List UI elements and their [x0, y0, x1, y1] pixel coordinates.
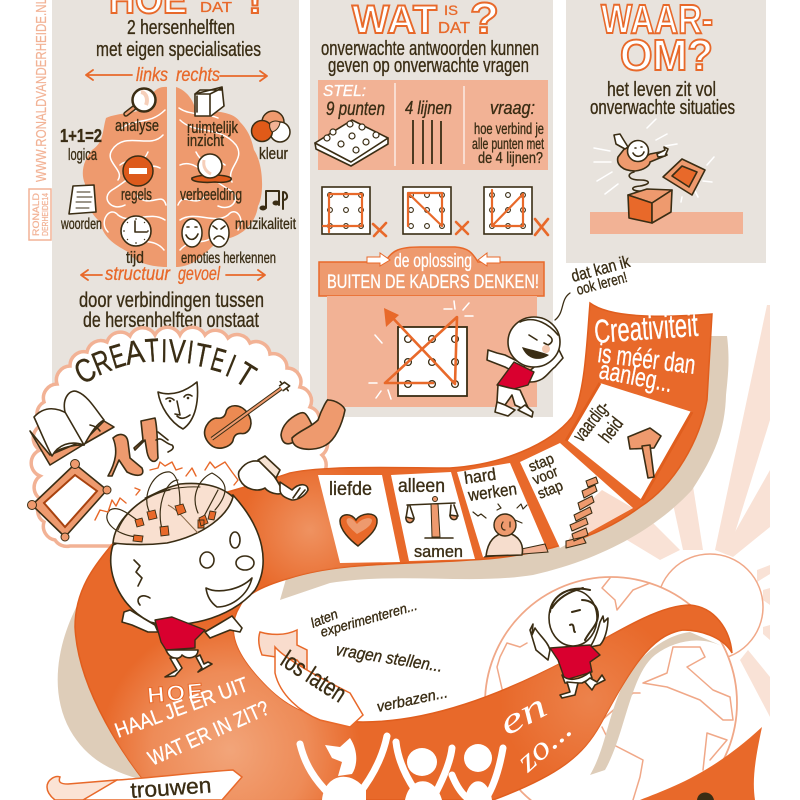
inner ribbon notes: vragen stellen... [334, 640, 444, 676]
title: creativiteit: T [192, 336, 213, 375]
labels: links rechts: rechts [176, 65, 220, 86]
electrodes and wires [107, 472, 225, 542]
conclusion text [79, 289, 264, 332]
los laten banner [259, 630, 363, 727]
card: stap voor stap: stap [526, 450, 557, 476]
labels: links rechts: links [136, 65, 168, 86]
intro text: het leven zit vol [607, 79, 716, 101]
icon: violin [199, 371, 297, 454]
brain labels: ruimtelijk [187, 118, 238, 137]
brain diagram [83, 87, 262, 267]
panel: waarom [566, 0, 766, 263]
intro text: onverwachte antwoorden kunnen [321, 38, 539, 60]
card: alleen samen: samen [414, 542, 463, 561]
lightbulb [238, 456, 308, 500]
text: hoe haal je er uit: HAAL JE ER UIT [112, 673, 251, 743]
puzzle panel: 4 lijnen [405, 98, 452, 118]
website credit: RONALD [31, 192, 41, 236]
website credit: DERHEIDE14 [41, 193, 50, 236]
title: creativiteit: I [185, 333, 196, 371]
puzzle panel: de 4 lijnen? [478, 150, 543, 167]
heading: creativiteit is meer dan aanleg: Creativiteit [593, 306, 699, 350]
ribbon end at bottom right [640, 727, 762, 800]
puzzle panel: STEL: [323, 83, 366, 100]
speech squiggle [555, 293, 570, 320]
card: vaardigheid: heid [595, 414, 628, 447]
icon: clock [121, 216, 151, 246]
intro text [590, 79, 735, 119]
title: creativiteit: T [144, 331, 160, 369]
group of people silhouettes [300, 736, 503, 800]
website credit [29, 0, 51, 240]
title: creativiteit: I [161, 332, 168, 369]
brain labels: inzicht [187, 131, 224, 150]
brain labels: logica [68, 145, 97, 164]
heading: wat is dat: IS [444, 2, 458, 18]
inner ribbon notes: experimenteren... [318, 597, 419, 640]
trouwen banner [47, 770, 242, 800]
labels: links rechts [86, 65, 267, 86]
heading: creativiteit is meer dan aanleg: is méér dan [596, 338, 697, 380]
speech text: ook leren! [575, 269, 629, 299]
text: en zo: zo... [508, 710, 579, 779]
wrong attempt 1 [322, 187, 386, 236]
jack in the box [594, 119, 714, 223]
inner ribbon notes: verbazen... [375, 684, 449, 716]
heading: creativiteit is meer dan aanleg: aanleg... [597, 354, 675, 398]
intro text [321, 38, 539, 77]
title: creativiteit: A [122, 332, 147, 372]
icon: ballet shoes [108, 418, 173, 476]
title: creativiteit: I [221, 347, 241, 384]
card: liefde: liefde [329, 479, 372, 500]
person on globe [530, 588, 608, 698]
conclusion text: door verbindingen tussen [79, 289, 264, 312]
face [134, 532, 254, 607]
solution diagram [327, 296, 537, 407]
icon: music notes [260, 191, 287, 210]
brain labels: tijd [126, 248, 144, 267]
conclusion text: de hersenhelften onstaat [83, 309, 259, 332]
card: vaardigheid [566, 383, 692, 500]
card: alleen samen [391, 472, 475, 561]
text: hoe haal je er uit: WAT ER IN ZIT? [145, 697, 273, 771]
card: hard werken: hard [463, 465, 497, 488]
title: creativiteit: R [87, 342, 116, 382]
card: stap voor stap: voor [530, 463, 561, 489]
heading: creativiteit is meer dan aanleg [593, 306, 699, 398]
sparks [95, 462, 238, 520]
text: en zo: en [492, 685, 553, 743]
banner: solution: BUITEN DE KADERS DENKEN! [327, 272, 539, 293]
labels: structuur gevoel: structuur [105, 264, 171, 285]
title: creativiteit: T [229, 355, 262, 394]
heading: hoe [109, 0, 262, 22]
cloud of creative works [28, 327, 345, 546]
inner ribbon notes: laten [308, 605, 340, 631]
brain labels: 1+1=2 [60, 126, 102, 146]
icon: happy and sad faces [182, 219, 229, 247]
panel: hoe doe je dat [52, 0, 299, 392]
speech text [569, 252, 632, 299]
banner: solution [319, 247, 544, 296]
icon: clogs [281, 400, 345, 449]
head [95, 462, 263, 625]
text: hoe haal je er uit [112, 673, 273, 771]
heading: waarom: OM? [620, 31, 713, 80]
text: en zo [492, 685, 579, 779]
icon: colour circles [252, 111, 290, 142]
puzzle panel: alle punten met [472, 136, 544, 153]
card: hard werken [457, 463, 548, 557]
icon: no entry sign [123, 156, 153, 186]
card: stap voor stap: stap [535, 477, 566, 503]
brain labels: woorden [60, 216, 102, 233]
icon: theatre mask [158, 382, 198, 429]
brain labels: analyse [115, 116, 159, 135]
text: hoe haal je er uit: HOE [146, 678, 206, 708]
card: vaardigheid: vaardig- [569, 397, 614, 446]
four lines [413, 120, 441, 164]
intro text: met eigen specialisaties [96, 39, 261, 61]
brain labels: emoties herkennen [181, 250, 276, 267]
icon: pegboard [315, 120, 388, 166]
card: hard werken: werken [466, 479, 518, 505]
icon: crystal ball [192, 154, 231, 182]
brain labels [60, 116, 296, 267]
intro text [96, 17, 261, 61]
speech text: dat kan ik [569, 252, 632, 286]
sun [657, 554, 763, 660]
labels: structuur gevoel: gevoel [178, 264, 221, 285]
ground [590, 212, 743, 234]
title: creativiteit: E [207, 340, 230, 379]
intro text: geven op onverwachte vragen [328, 55, 529, 77]
puzzle panel: hoe verbind je [474, 121, 544, 138]
icon: picture frame [28, 460, 111, 541]
person pointing on wat-panel edge [487, 252, 632, 417]
sun rays [627, 305, 770, 717]
card: liefde [318, 475, 400, 563]
heading: waarom [601, 0, 713, 80]
labels: structuur gevoel [81, 264, 265, 285]
wrong attempt 3 [484, 187, 548, 235]
los laten banner: los laten [276, 646, 351, 708]
main ribbon [70, 303, 732, 800]
inner ribbon notes [308, 597, 449, 716]
ribbon shadow [58, 336, 729, 786]
puzzle panel: 9 punten [326, 99, 385, 120]
person under head [122, 610, 242, 677]
puzzle panel [315, 80, 548, 170]
title: creativiteit [68, 331, 262, 394]
icon: cube [195, 87, 224, 116]
intro text: onverwachte situaties [590, 97, 735, 119]
card: alleen samen: alleen [398, 476, 445, 497]
globe [485, 577, 737, 800]
brain labels: regels [121, 185, 152, 204]
title: creativiteit: V [168, 332, 187, 370]
puzzle panel: vraag: [490, 98, 535, 118]
intro text: 2 hersenhelften [127, 17, 235, 39]
brain labels: verbeelding [180, 185, 242, 204]
wrong attempt 2 [403, 187, 468, 234]
icon: document [69, 185, 96, 214]
heading: wat is dat: DAT [438, 20, 470, 37]
icon: open book [30, 391, 114, 465]
banner: solution: de oplossing [394, 251, 472, 272]
heading: wat is dat [352, 0, 499, 43]
title: creativiteit: C [68, 350, 102, 391]
brain labels: muzikaliteit [235, 216, 296, 233]
card: stap voor stap [520, 443, 633, 548]
brain labels: kleur [259, 144, 288, 163]
brain opening [113, 483, 233, 544]
panel: wat is dat [310, 0, 553, 417]
icon: magnifier [126, 88, 156, 114]
title: creativiteit: E [105, 336, 129, 376]
